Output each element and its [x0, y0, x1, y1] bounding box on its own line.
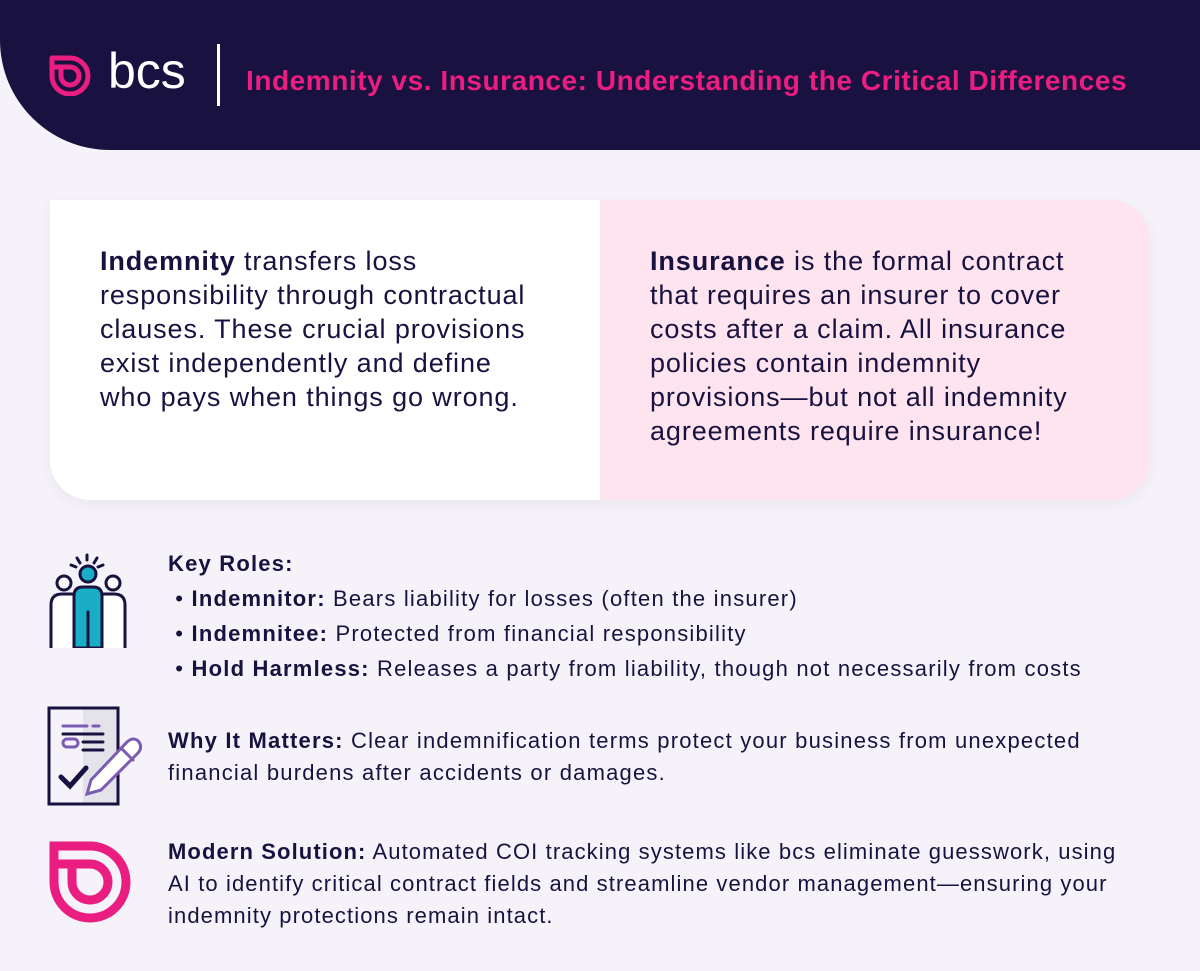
text: key roles: • Hold Harmless: Releases a party from liability, though not necessarily from costs [175, 656, 1082, 681]
panel: indemnity: exist independently and define [100, 348, 492, 378]
icon: document with pen [48, 706, 142, 806]
text: modern solution: indemnity protections remain intact. [168, 903, 554, 928]
text: modern solution [168, 839, 1116, 928]
panel: indemnity: Indemnity transfers loss [100, 246, 417, 276]
text: why it matters: Why It Matters: Clear indemnification terms protect your business from unexpected [168, 728, 1081, 753]
icon: people [50, 554, 126, 648]
text: why it matters: financial burdens after accidents or damages. [168, 760, 666, 785]
panel: indemnity: clauses. These crucial provisions [100, 314, 525, 344]
text: key roles: Key Roles: [168, 551, 294, 576]
title: Indemnity vs. Insurance: Understanding the Critical Differences [246, 65, 1127, 96]
text: modern solution: AI to identify critical contract fields and streamline vendor management—ensuring your [168, 871, 1108, 896]
panel: indemnity [100, 246, 525, 412]
panel: indemnity: who pays when things go wrong. [100, 382, 519, 412]
text: key roles [168, 551, 1082, 681]
text: why it matters [168, 728, 1081, 785]
panel: indemnity: responsibility through contractual [100, 280, 525, 310]
panel: insurance: agreements require insurance! [650, 416, 1042, 446]
text: key roles: • Indemnitor: Bears liability for losses (often the insurer) [175, 586, 798, 611]
panel: insurance [600, 200, 1150, 500]
comparison card [50, 200, 1150, 500]
icon: bcs logo [50, 842, 130, 922]
logo: bcs: bcs [108, 43, 186, 99]
panel: insurance: provisions—but not all indemnity [650, 382, 1068, 412]
logo: bcs [50, 43, 186, 99]
header banner [0, 0, 1200, 150]
panel: insurance: Insurance is the formal contract [650, 246, 1064, 276]
text: key roles: • Indemnitee: Protected from financial responsibility [175, 621, 747, 646]
text: modern solution: Modern Solution: Automated COI tracking systems like bcs eliminate guesswork, using [168, 839, 1116, 864]
panel: insurance: policies contain indemnity [650, 348, 981, 378]
panel: insurance: costs after a claim. All insurance [650, 314, 1066, 344]
panel: insurance: that requires an insurer to cover [650, 280, 1061, 310]
